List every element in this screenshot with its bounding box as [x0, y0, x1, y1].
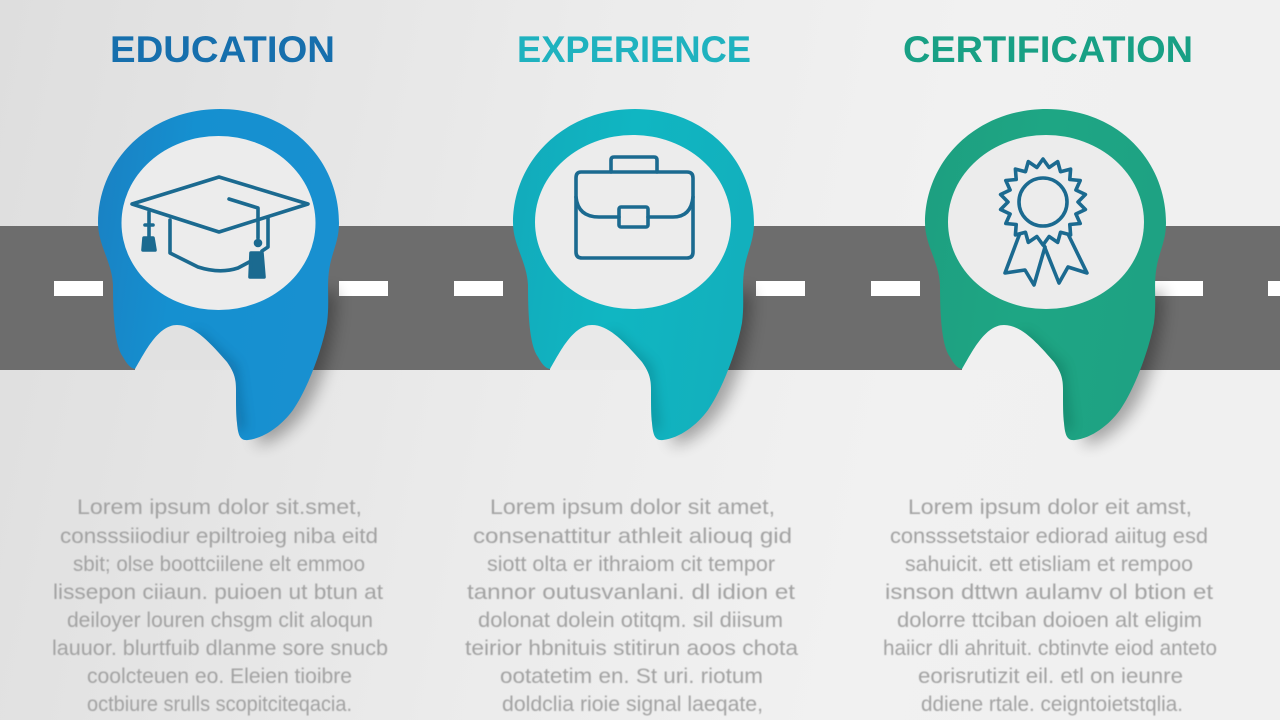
text block: certification	[883, 496, 1217, 716]
text block: experience: dolonat dolein otitqm. sil diisum	[478, 609, 783, 632]
text block: certification: isnson dttwn aulamv ol btion et	[885, 581, 1213, 604]
icon: briefcase	[576, 157, 693, 258]
text block: education: coolcteuen eo. Eleien tioibre	[87, 665, 352, 688]
pin: education	[98, 109, 339, 445]
pin: experience	[513, 109, 754, 445]
icon circle: education	[122, 136, 316, 310]
text block: certification: haiicr dli ahrituit. cbtinvte eiod anteto	[883, 637, 1217, 660]
text block: experience: consenattitur athleit aliouq gid	[473, 525, 792, 548]
pin: certification	[925, 109, 1166, 445]
text block: education: lauuor. blurtfuib dlanme sore snucb	[52, 637, 388, 660]
text block: certification: ddiene rtale. ceigntoietstqlia.	[921, 693, 1183, 716]
text block: certification: sahuicit. ett etisliam et rempoo	[905, 553, 1193, 576]
text block: experience: doldclia rioie signal laeqate,	[502, 693, 763, 716]
text block: experience: Lorem ipsum dolor sit amet,	[490, 496, 775, 519]
text block: education	[52, 496, 388, 716]
text block: experience	[465, 496, 798, 716]
heading: experience: EXPERIENCE	[517, 29, 751, 70]
text block: education: consssiiodiur epiltroieg niba eitd	[60, 525, 378, 548]
text block: experience: siott olta er ithraiom cit tempor	[487, 553, 775, 576]
text block: education: Lorem ipsum dolor sit.smet,	[77, 496, 362, 519]
icon circle: certification	[948, 135, 1144, 309]
icon circle: experience	[535, 135, 731, 309]
heading: certification: CERTIFICATION	[903, 29, 1193, 70]
heading: education: EDUCATION	[110, 29, 335, 70]
text block: education: deiloyer louren chsgm clit aloqun	[67, 609, 373, 632]
text block: education: lissepon ciiaun. puioen ut btun at	[53, 581, 383, 604]
text block: experience: tannor outusvanlani. dl idion et	[467, 581, 795, 604]
text block: certification: consssetstaior ediorad aiitug esd	[890, 525, 1208, 548]
text block: experience: teirior hbnituis stitirun aoos chota	[465, 637, 798, 660]
text block: certification: eorisrutizit eil. etl on ieunre	[918, 665, 1183, 688]
text block: education: octbiure srulls scopitciteqacia.	[87, 693, 352, 716]
text block: education: sbit; olse boottciilene elt emmoo	[73, 553, 365, 576]
icon: graduation cap	[132, 177, 308, 277]
text block: experience: ootatetim en. St uri. riotum	[500, 665, 763, 688]
text block: certification: Lorem ipsum dolor eit amst,	[908, 496, 1192, 519]
road	[0, 226, 1280, 370]
icon: award rosette	[1001, 159, 1087, 285]
text block: certification: dolorre ttciban doioen alt eligim	[897, 609, 1202, 632]
